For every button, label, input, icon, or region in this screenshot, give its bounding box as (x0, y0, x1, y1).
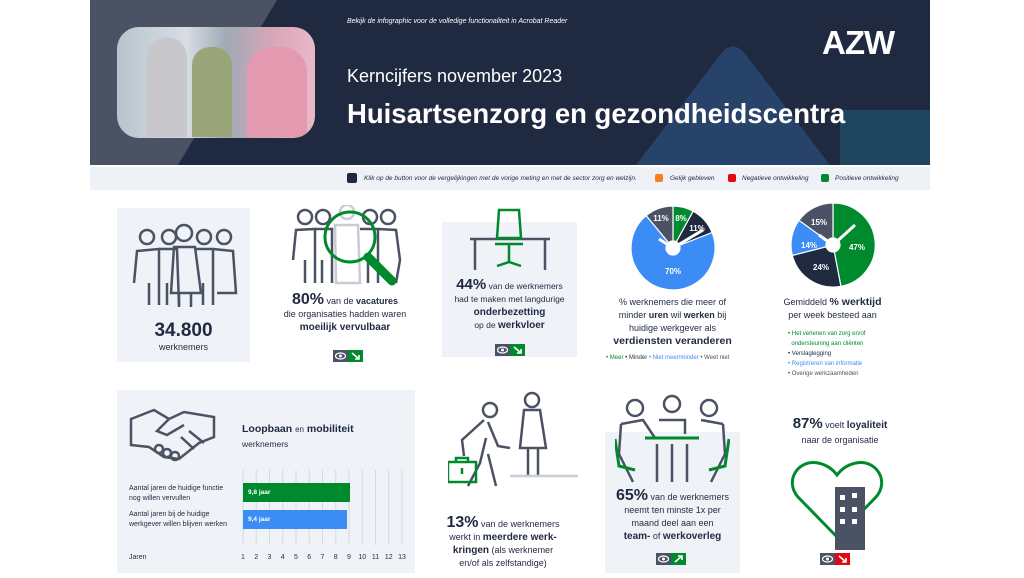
text: 80% vacatures: moeilijk vervulbaar (300, 322, 390, 333)
text: 13%: en/of als zelfstandige) (459, 558, 547, 568)
badge (820, 553, 850, 565)
bar chart: 3 (268, 554, 271, 561)
panel: employees (117, 208, 250, 362)
legend bar: Positieve ontwikkeling (835, 175, 899, 182)
bar chart: 8 (334, 554, 338, 561)
text: 13%: kringen (als werknemer (453, 545, 553, 556)
text: 13%: werkt in meerdere werk- (449, 532, 557, 543)
text: 65%: team- of werkoverleg (624, 531, 721, 542)
text: 44%: 44% van de werknemers (456, 276, 563, 293)
panel: vacatures (284, 205, 406, 362)
text: werktijd (784, 296, 881, 320)
chart: pie werktijd: 24% (813, 263, 829, 272)
chart: pie werktijd: 15% (811, 218, 827, 227)
icon: walking people (448, 392, 578, 487)
bar chart: 9 (347, 554, 351, 561)
text: uren: % werknemers die meer of (619, 297, 726, 307)
panel: loyaliteit (790, 415, 888, 565)
bar chart: 1 (241, 554, 245, 561)
chart: pie werktijd: 14% (801, 241, 817, 250)
chart: pie werktijd: 47% (849, 243, 865, 252)
panel: onderbezetting (442, 222, 577, 357)
header banner (90, 0, 930, 165)
text: 80% vacatures: die organisaties hadden waren (284, 309, 406, 319)
text: 87%: naar de organisatie (801, 435, 879, 445)
bar chart (129, 470, 406, 561)
legend: werktijd: • Het verlenen van zorg en/of (788, 331, 865, 337)
bar chart: 9,4 jaar (248, 516, 270, 523)
bar chart: 13 (398, 554, 406, 561)
icon: handshake (130, 408, 216, 462)
text: uren: huidige werkgever als (629, 323, 716, 333)
badge (333, 350, 363, 362)
bar chart: 4 (281, 554, 285, 561)
stat: 34.800: 34.800 (154, 320, 213, 341)
text: 44%: onderbezetting (474, 307, 545, 318)
legend: werktijd: • Verslaglegging (788, 351, 831, 357)
text: werktijd: per week besteed aan (788, 310, 877, 320)
chart: pie uren: 70% (665, 267, 681, 276)
panel: loopbaan (117, 390, 415, 573)
chart: pie uren: 11% (653, 214, 669, 223)
panel: loopbaan: werknemers (242, 439, 288, 449)
bar chart: Jaren (129, 554, 147, 561)
icon: desk chair (470, 208, 550, 270)
text: 44% (454, 276, 565, 331)
bar chart: 5 (294, 554, 298, 561)
text: 44%: op de werkvloer (474, 320, 545, 331)
title: Huisartsenzorg en gezondheidscentra (347, 98, 845, 129)
text: 87%: 87% voelt loyaliteit (793, 415, 887, 432)
text: 13%: 13% van de werknemers (446, 514, 560, 531)
bar chart: 7 (321, 554, 324, 561)
photo (117, 27, 315, 138)
legend bar: Gelijk gebleven (670, 175, 714, 182)
logo: AZW (822, 24, 894, 61)
subtitle: Kerncijfers november 2023 (347, 66, 562, 86)
badge (656, 553, 686, 565)
legend: werktijd: ondersteuning aan cliënten (791, 341, 863, 347)
text: 65%: maand deel aan een (631, 518, 714, 528)
bar chart: 10 (358, 554, 366, 561)
icon: people (132, 224, 238, 307)
heading: loopbaan: Loopbaan en mobiliteit (242, 423, 354, 435)
icon: meeting (615, 394, 730, 482)
chart: pie uren: 11% (689, 224, 705, 233)
chart: pie uren: 8% (675, 214, 687, 223)
text: 65%: 65% van de werknemers (616, 487, 729, 504)
chart: pie uren (632, 206, 715, 290)
text: werktijd: Gemiddeld % werktijd (784, 296, 881, 308)
chart: pie werktijd (792, 204, 875, 286)
panel: meerdere werkkringen (446, 392, 578, 568)
bar chart: 11 (372, 554, 379, 561)
icon: heart with building (790, 461, 884, 550)
bar chart: Aantal jaren bij de huidige (129, 511, 210, 518)
text: uren: minder uren wil werken bij (619, 310, 726, 320)
text: 65%: neemt ten minste 1x per (624, 505, 721, 515)
text: 65% (616, 487, 729, 542)
legend bar: Negatieve ontwikkeling (742, 175, 808, 182)
bar chart: 9,8 jaar (248, 489, 270, 496)
text: uren (613, 297, 732, 347)
panel: overleg (605, 432, 740, 573)
legend: werktijd: • Registreren van informatie (788, 361, 862, 367)
legend: uren: • Meer • Minder • Niet meer/minder • Weet niet (606, 355, 729, 361)
text: 80% vacatures (284, 291, 406, 333)
icon: people with magnifier (292, 205, 402, 286)
text: 13% (446, 514, 560, 568)
text: uren: verdiensten veranderen (613, 335, 732, 347)
bar chart: nog willen vervullen (129, 495, 190, 502)
text: 80% vacatures: 80% van de vacatures (292, 291, 398, 308)
bar chart: 6 (307, 554, 311, 561)
text: 87% (793, 415, 888, 445)
bar chart: Aantal jaren de huidige functie (129, 485, 223, 492)
bar chart: 2 (254, 554, 258, 561)
legend bar: Klik op de button voor de vergelijkingen met de vorige meting en met de sector zorg en welzijn. (364, 175, 637, 182)
legend: werktijd: • Overige werkzaamheden (788, 371, 858, 377)
legend: werktijd (788, 330, 866, 377)
bar chart: werkgever willen blijven werken (129, 521, 227, 528)
bar chart: 12 (385, 554, 393, 561)
panel: employees: werknemers (159, 342, 208, 352)
note text: Bekijk de infographic voor de volledige functionaliteit in Acrobat Reader (347, 18, 567, 25)
badge (495, 344, 525, 356)
text: 44%: had te maken met langdurige (454, 294, 565, 304)
legend bar (90, 167, 930, 190)
